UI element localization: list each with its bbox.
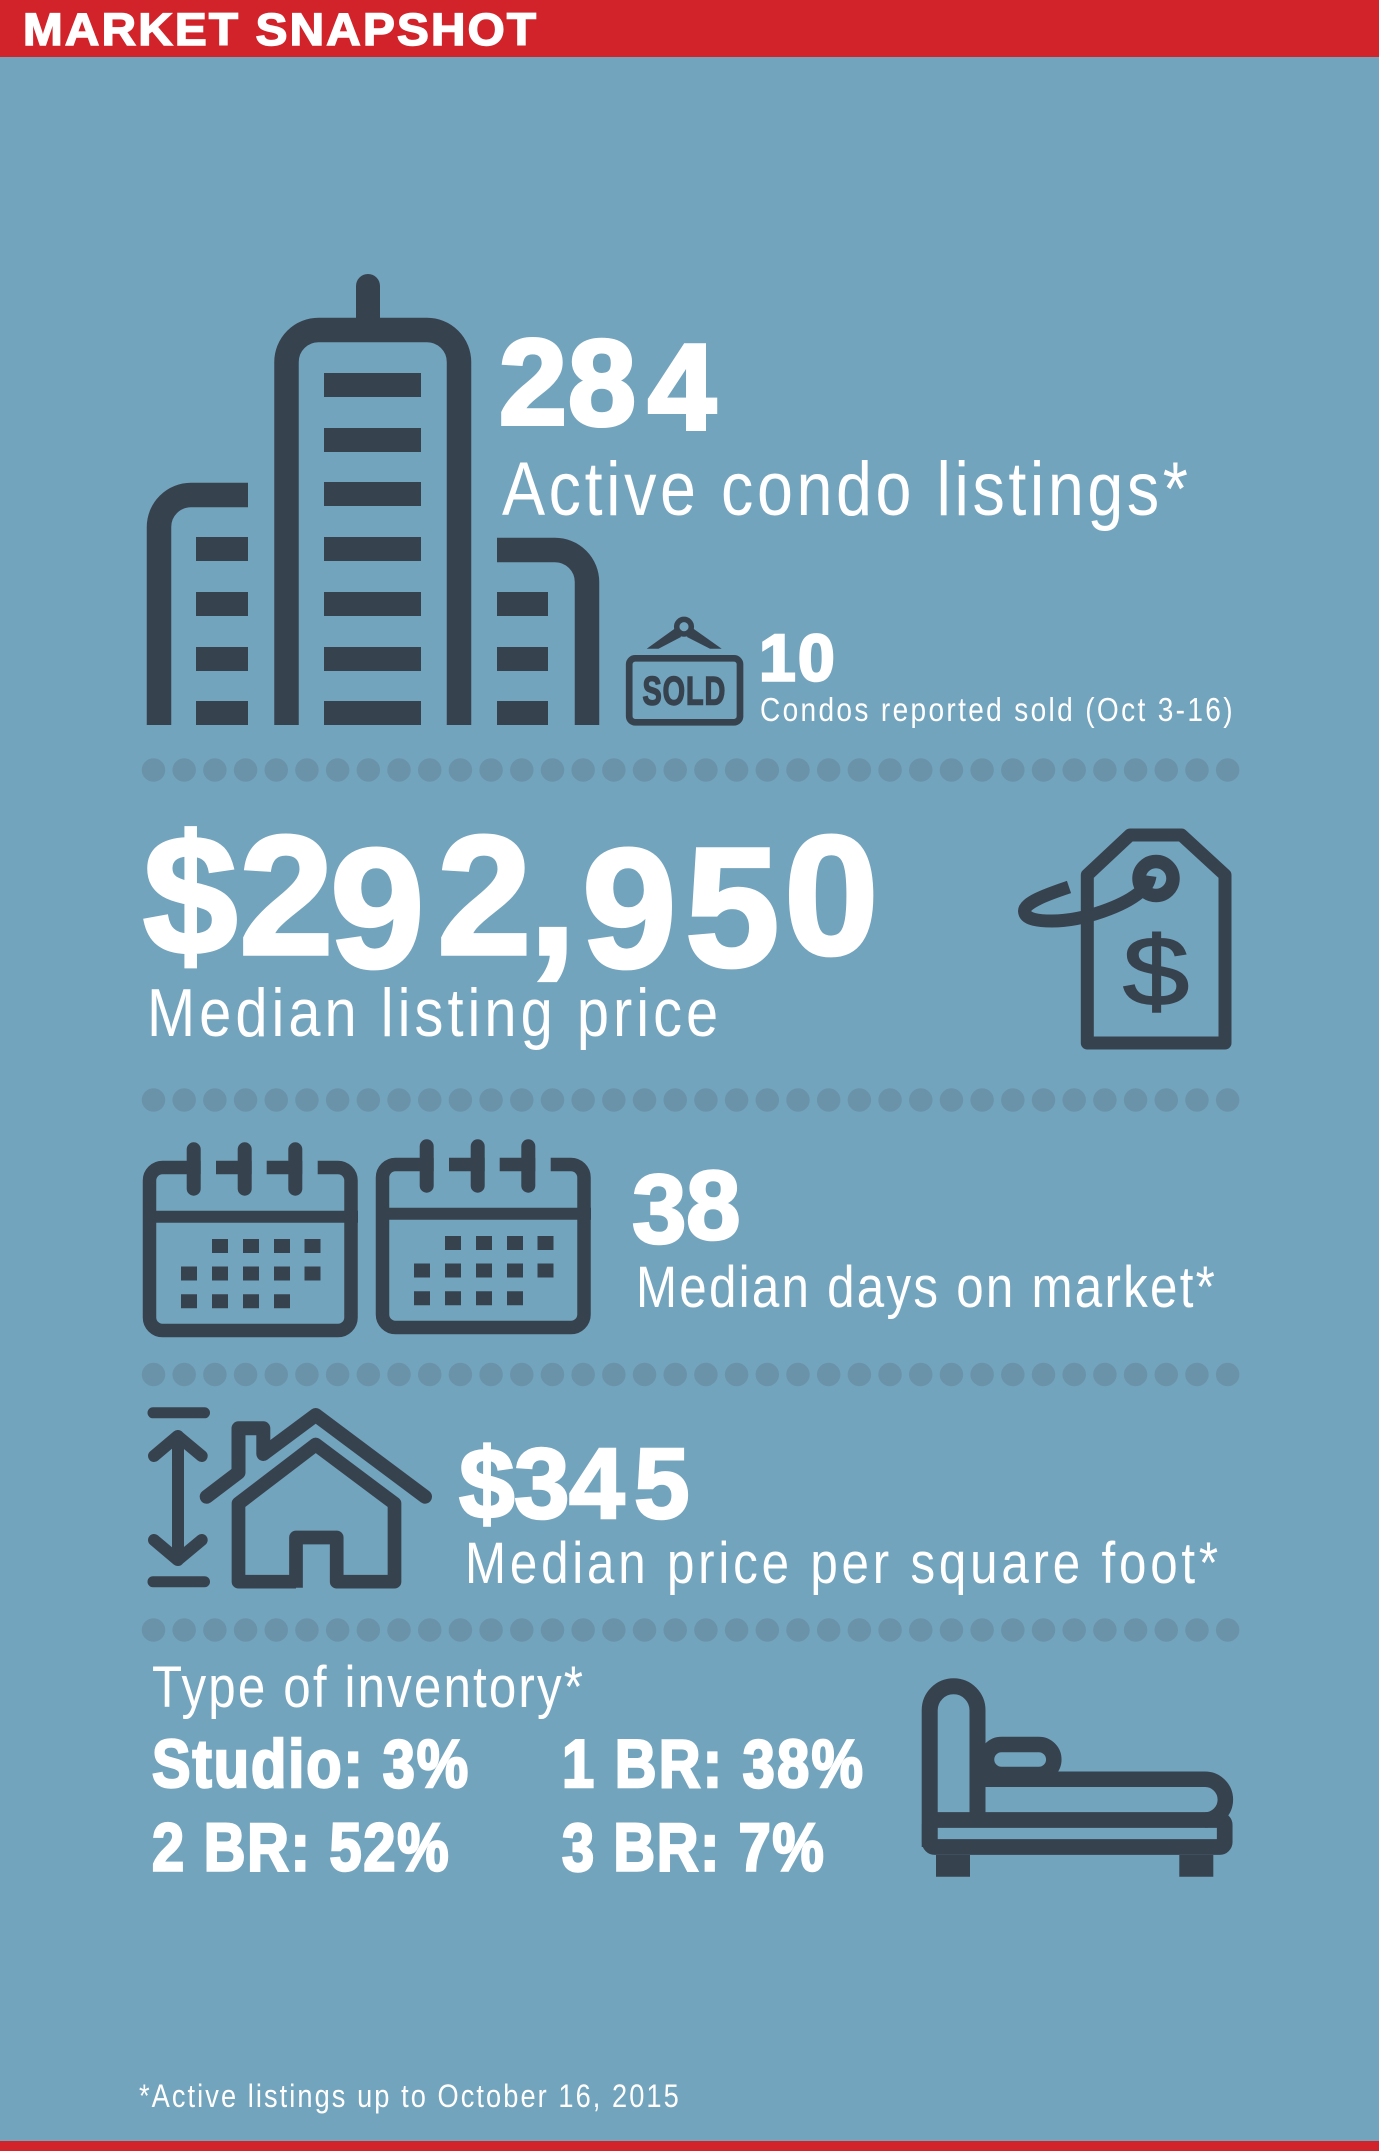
icon: condo buildings	[159, 286, 587, 725]
stat: active condo listings	[499, 314, 1188, 531]
stat: median listing price: $292,950	[143, 801, 879, 1004]
stat: median days on market: 38	[632, 1150, 741, 1264]
stat: price per square foot: Median price per square foot*	[465, 1531, 1218, 1596]
inventory: one bedroom: 1 BR: 38%	[562, 1727, 863, 1802]
stat: condos sold: 10	[759, 620, 835, 694]
stat: median days on market: Median days on market*	[636, 1255, 1215, 1320]
icon: price tag	[1024, 835, 1225, 1043]
stat: median listing price: Median listing price	[147, 976, 718, 1051]
stat: condos sold	[759, 620, 1233, 729]
icon: height arrow	[153, 1413, 204, 1582]
icon: calendar one	[143, 1149, 358, 1330]
inventory: two bedroom: 2 BR: 52%	[152, 1810, 449, 1886]
icon: bed	[930, 1686, 1225, 1877]
icon: two calendars	[143, 1146, 591, 1330]
stat: median days on market	[632, 1150, 1215, 1320]
icon: sold sign: SOLD	[642, 669, 725, 714]
stat: price per square foot: $345	[459, 1428, 690, 1540]
header bar: MARKET SNAPSHOT	[23, 4, 536, 55]
stat: active condo listings: 284	[499, 314, 716, 455]
inventory breakdown	[152, 1655, 863, 1886]
footer bar	[0, 2141, 1379, 2151]
stat: active condo listings: Active condo listings*	[502, 446, 1188, 531]
stat: condos sold: Condos reported sold (Oct 3-16)	[760, 692, 1233, 729]
icon: sold sign	[629, 619, 740, 722]
inventory: three bedroom: 3 BR: 7%	[562, 1810, 824, 1886]
footnote: *Active listings up to October 16, 2015	[139, 2079, 679, 2115]
header bar	[0, 0, 1379, 57]
icon: house	[207, 1415, 425, 1588]
inventory heading: Type of inventory*	[152, 1655, 583, 1720]
icon: price tag: $	[1123, 917, 1189, 1027]
icon: calendar two	[376, 1146, 591, 1328]
stat: price per square foot	[459, 1428, 1218, 1596]
inventory: studio: Studio: 3%	[152, 1727, 468, 1802]
